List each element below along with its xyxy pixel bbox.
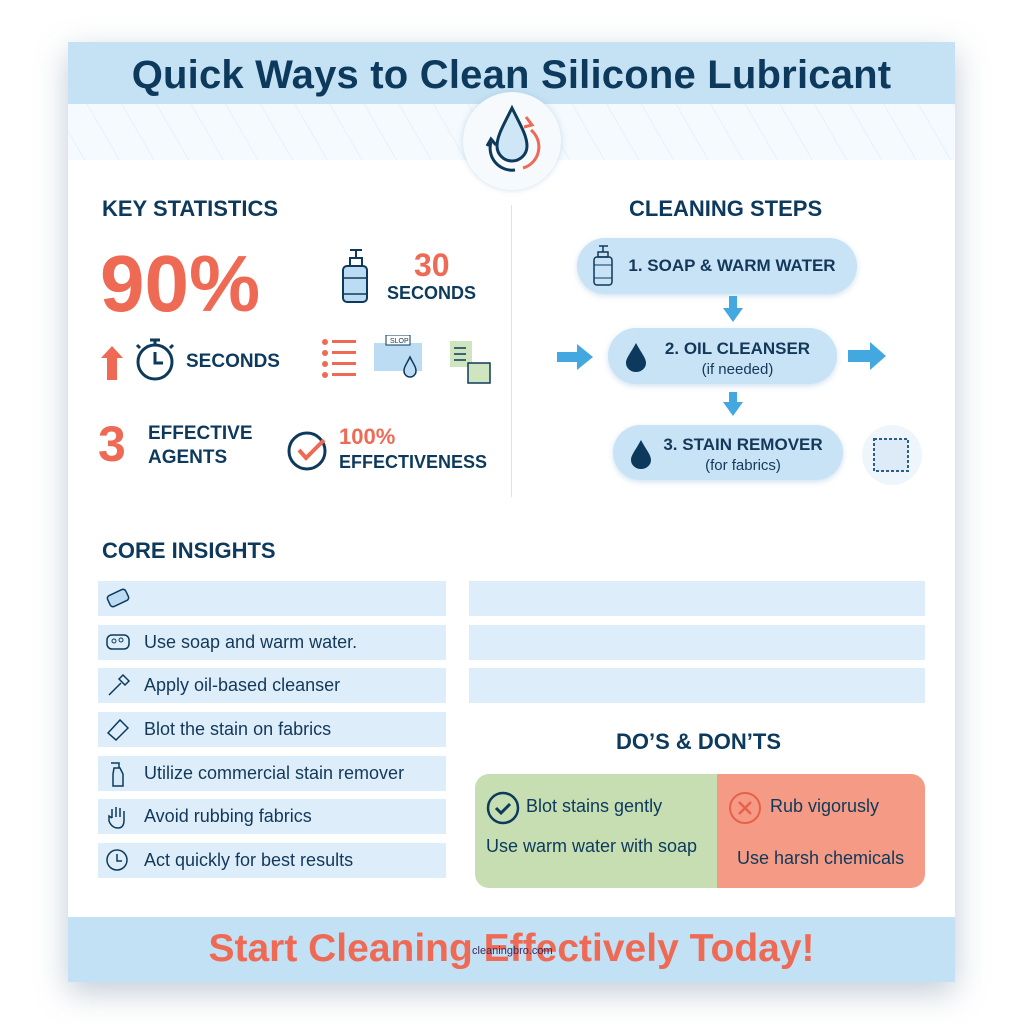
step 2: 2. OIL CLEANSER [665,339,810,358]
row: stain remover [98,756,446,791]
pattern band [68,104,955,160]
step 1 [577,238,857,294]
row: empty [98,581,446,616]
row: avoid rubbing [98,799,446,834]
step 2 [608,328,837,384]
row: act quickly: Act quickly for best results [144,850,353,870]
stat: 100% effectiveness [288,424,487,472]
stat: seconds with timer: SECONDS [186,351,280,372]
divider [511,205,512,497]
dont column: Rub vigorusly [770,796,879,816]
arrow right [848,342,886,370]
row: soap: Use soap and warm water. [144,632,357,652]
icons: list, soap, documents [322,335,491,384]
stat: seconds with timer [101,338,280,380]
row: act quickly [98,843,446,878]
card [68,42,955,982]
icon: water drop cycle [463,92,561,190]
heading: dos and donts: DO’S & DON’TS [616,729,781,754]
dont column: Use harsh chemicals [737,848,904,868]
row: cleanser [98,668,446,703]
stat: 30 seconds: SECONDS [387,283,476,303]
icon: fabric [862,425,922,485]
row: stain remover: Utilize commercial stain remover [144,763,404,783]
footer band [68,917,955,982]
do column: Use warm water with soap [486,836,697,856]
footer call to action: Start Cleaning Effectively Today! [208,927,815,970]
step 2: (if needed) [702,361,773,378]
arrow down 1 [723,296,743,322]
header band [68,42,955,104]
stat: 3 effective agents: 3 [98,416,126,472]
step 3: (for fabrics) [705,457,781,474]
stat: 3 effective agents: AGENTS [148,447,227,468]
heading: key statistics: KEY STATISTICS [102,196,278,221]
row: blot: Blot the stain on fabrics [144,719,331,739]
title: Quick Ways to Clean Silicone Lubricant [132,53,891,97]
row: cleanser: Apply oil-based cleanser [144,675,340,695]
stat: 30 seconds [342,247,476,303]
step 1: 1. SOAP & WARM WATER [628,256,836,275]
do column: Blot stains gently [526,796,662,816]
dos and donts box [475,774,925,888]
stat: 90%: 90% [100,239,260,328]
row: blot [98,712,446,747]
stat: 100% effectiveness: EFFECTIVENESS [339,452,487,472]
stat: 30 seconds: 30 [414,247,450,283]
heading: cleaning steps: CLEANING STEPS [629,196,822,221]
arrow left [557,344,593,370]
right empty rows [469,581,925,703]
stat: 100% effectiveness: 100% [339,424,395,449]
dont column [717,774,925,888]
do column [475,774,717,888]
heading: core insights: CORE INSIGHTS [102,538,276,563]
watermark: cleaningbro.com [472,945,553,957]
arrow down 2 [723,392,743,416]
stat: 3 effective agents: EFFECTIVE [148,423,253,444]
step 3: 3. STAIN REMOVER [663,435,823,454]
row: avoid rubbing: Avoid rubbing fabrics [144,806,312,826]
insight rows [98,581,446,878]
row: soap [98,625,446,660]
icons: list, soap, documents: SLOP [390,338,409,345]
stat: 3 effective agents [98,416,253,472]
step 3 [613,425,843,480]
